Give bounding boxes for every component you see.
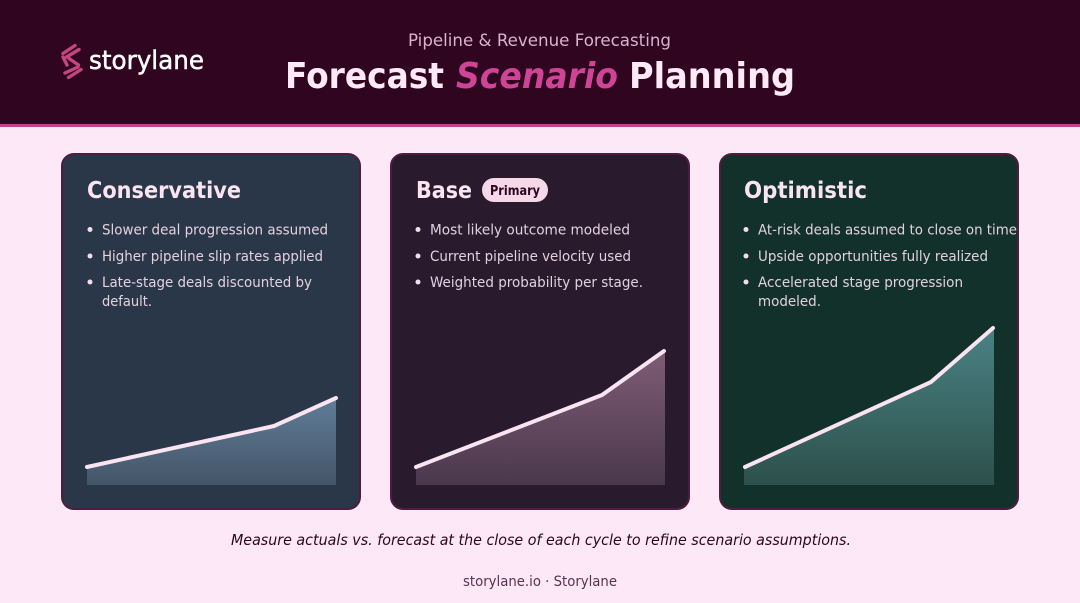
bullet list: conservative: Late-stage deals discounted by bbox=[102, 275, 312, 291]
bullet list: optimistic: modeled. bbox=[758, 294, 821, 310]
bullet list: optimistic: At-risk deals assumed to close on time bbox=[758, 222, 1017, 238]
badge: primary bbox=[482, 178, 548, 202]
logo: storylane: storylane bbox=[89, 46, 204, 76]
bullet list: conservative: default. bbox=[102, 294, 152, 310]
area chart: conservative bbox=[87, 398, 336, 485]
title: Planning bbox=[629, 56, 795, 97]
icon: storylane mark bbox=[63, 46, 81, 78]
bullet list: optimistic bbox=[744, 222, 1017, 310]
panel: optimistic bbox=[720, 154, 1018, 509]
heading: optimistic: Optimistic bbox=[744, 178, 867, 204]
badge: primary: Primary bbox=[490, 183, 540, 199]
bullet list: conservative bbox=[88, 222, 328, 310]
area chart: base bbox=[416, 351, 665, 485]
bullet list: optimistic: Accelerated stage progression bbox=[758, 275, 963, 291]
heading: conservative: Conservative bbox=[87, 178, 241, 204]
footnote: Measure actuals vs. forecast at the close of each cycle to refine scenario assumptions. bbox=[231, 531, 851, 549]
header band bbox=[0, 0, 1080, 127]
bullet list: base bbox=[416, 222, 643, 291]
bullet list: base: Weighted probability per stage. bbox=[430, 275, 643, 291]
bullet list: base: Current pipeline velocity used bbox=[430, 249, 631, 265]
area chart: optimistic bbox=[744, 328, 994, 485]
bullet list: optimistic: Upside opportunities fully realized bbox=[758, 249, 988, 265]
title bbox=[285, 56, 795, 97]
title: Scenario bbox=[456, 56, 618, 97]
heading: base: Base bbox=[416, 178, 472, 204]
bullet list: conservative: Higher pipeline slip rates applied bbox=[102, 249, 323, 265]
panel: conservative bbox=[62, 154, 360, 509]
panel: base bbox=[391, 154, 689, 509]
bullet list: conservative: Slower deal progression assumed bbox=[102, 222, 328, 238]
subtitle: Pipeline & Revenue Forecasting bbox=[408, 31, 671, 50]
footer credit: storylane.io · Storylane bbox=[463, 574, 617, 590]
bullet list: base: Most likely outcome modeled bbox=[430, 222, 630, 238]
title: Forecast bbox=[285, 56, 444, 97]
